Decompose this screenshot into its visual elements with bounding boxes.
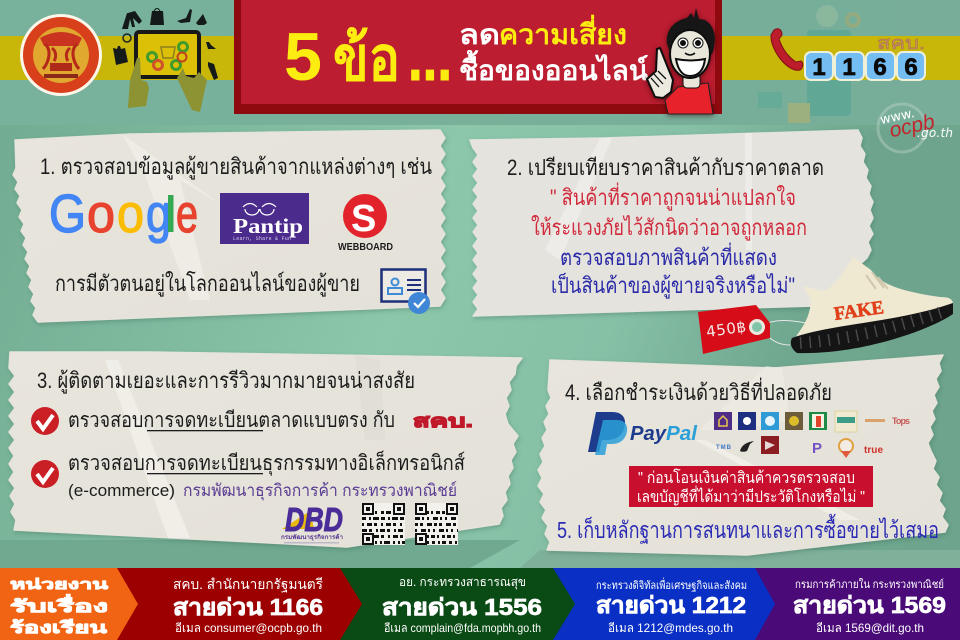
hotline MDES: อีเมล 1212@mdes.go.th xyxy=(608,621,733,635)
footer heading: รับเรื่อง xyxy=(10,594,108,616)
heading 3: 3. ผู้ติดตามเยอะและการรีวิวมากมายจนน่าสงสัย xyxy=(37,368,415,394)
PayPal logo: Pal xyxy=(666,423,697,445)
Pantip logo xyxy=(220,193,309,244)
subtitle line 1 xyxy=(459,14,627,50)
footer heading: หน่วยงาน xyxy=(10,576,109,592)
hotline 1166 xyxy=(805,33,925,81)
subtitle line 1: ความเสี่ยง xyxy=(499,14,627,50)
website suffix: .go.th xyxy=(917,126,953,140)
Pantip logo: Learn, Share & Fun xyxy=(233,236,291,242)
hotline FDA: สายด่วน 1556 xyxy=(382,594,542,620)
DBD logo: กรมพัฒนาธุรกิจการค้า xyxy=(281,533,343,541)
footer heading: ร้องเรียน xyxy=(10,618,107,637)
warning text blue xyxy=(551,242,795,299)
warning text red xyxy=(531,182,807,241)
QR code 2 xyxy=(415,503,458,545)
website: www. xyxy=(879,106,916,128)
panel 2 xyxy=(470,130,873,316)
hotline FDA: อีเมล complain@fda.mopbh.go.th xyxy=(384,621,541,635)
price tag xyxy=(698,305,806,354)
price tag: 450฿ xyxy=(705,318,747,341)
e-commerce line: กรมพัฒนาธุรกิจการค้า กระทรวงพาณิชย์ xyxy=(183,481,457,501)
hotline DIT xyxy=(793,578,946,635)
Google logo xyxy=(49,184,198,244)
hotline FDA xyxy=(382,575,542,635)
hotline DIT: อีเมล 1569@dit.go.th xyxy=(816,621,924,635)
subtitle line 1: ลด xyxy=(459,19,500,50)
shopping tablet icon xyxy=(113,8,218,112)
hotline OCPB: อีเมล consumer@ocpb.go.th xyxy=(175,621,322,635)
warning text blue: เป็นสินค้าของผู้ขายจริงหรือไม่" xyxy=(551,271,795,299)
panel 4 xyxy=(538,355,948,555)
hotline FDA: อย. กระทรวงสาธารณสุข xyxy=(399,575,526,590)
main title: ข้อ xyxy=(333,25,400,94)
warning text red: ให้ระแวงภัยไว้สักนิดว่าอาจถูกหลอก xyxy=(531,215,807,241)
check line 1: ตรวจสอบการจดทะเบียนตลาดแบบตรง กับ xyxy=(68,409,395,432)
Google logo: G xyxy=(49,184,86,244)
webboard logo xyxy=(338,194,393,253)
Google logo: e xyxy=(176,184,198,244)
phone icon xyxy=(771,29,803,70)
yellow band xyxy=(0,36,960,80)
PayPal logo xyxy=(588,412,697,455)
heading 2: 2. เปรียบเทียบราคาสินค้ากับราคาตลาด xyxy=(507,155,824,180)
hotline MDES: สายด่วน 1212 xyxy=(596,592,746,618)
hotline DIT: กรมการค้าภายใน กระทรวงพาณิชย์ xyxy=(795,578,944,591)
hotline 1166: 1 xyxy=(842,54,856,81)
fake sneaker xyxy=(791,257,953,353)
hotline OCPB: สายด่วน 1166 xyxy=(173,594,323,620)
DBD logo: DBD xyxy=(285,501,343,538)
warning text blue: ตรวจสอบภาพสินค้าที่แสดง xyxy=(560,242,777,270)
red callout xyxy=(629,466,873,507)
panel 1 xyxy=(13,130,445,322)
subtitle line 2: ชื้อของออนไลน์ xyxy=(459,49,648,86)
hotline 1166: 6 xyxy=(873,54,887,81)
identity line: การมีตัวตนอยู่ในโลกออนไลน์ของผู้ขาย xyxy=(55,271,360,297)
Google logo: g xyxy=(146,184,171,244)
payment icons xyxy=(714,411,910,458)
payment icons: TMB xyxy=(716,445,732,451)
hotline DIT: สายด่วน 1569 xyxy=(793,592,946,618)
webboard logo: S xyxy=(351,198,376,240)
e-commerce line xyxy=(68,481,457,501)
hotline 1166: 1 xyxy=(812,54,826,81)
footer band xyxy=(0,568,960,640)
webboard logo: WEBBOARD xyxy=(338,242,393,253)
check line 1: สคบ. xyxy=(413,411,473,431)
Google logo: o xyxy=(87,184,115,244)
e-commerce line: (e-commerce) xyxy=(68,481,175,500)
warning text red: " สินค้าที่ราคาถูกจนน่าแปลกใจ xyxy=(550,182,796,211)
Pantip logo: Pantip xyxy=(233,214,303,238)
hotline MDES xyxy=(596,577,747,635)
heading 1: 1. ตรวจสอบข้อมูลผู้ขายสินค้าจากแหล่งต่างๆ เช่น xyxy=(40,154,432,180)
payment icons: P xyxy=(812,440,822,457)
main title: ... xyxy=(408,20,452,94)
icon: id card xyxy=(382,270,430,314)
hotline MDES: กระทรวงดิจิทัลเพื่อเศรษฐกิจและสังคม xyxy=(596,577,747,592)
agency label: สคบ. xyxy=(877,33,925,53)
footer heading xyxy=(10,576,109,637)
website: ocpb xyxy=(887,110,937,142)
red callout: " ก่อนโอนเงินค่าสินค้าควรตรวจสอบ xyxy=(638,468,855,487)
heading 4: 4. เลือกชำระเงินด้วยวิธีที่ปลอดภัย xyxy=(565,377,832,405)
icon: red check 1 xyxy=(31,407,59,435)
DBD logo xyxy=(281,501,343,544)
payment icons: true xyxy=(864,445,883,456)
PayPal logo: Pay xyxy=(630,423,667,445)
fake label: FAKE xyxy=(833,297,885,325)
faint background icons xyxy=(758,5,926,152)
QR code 1 xyxy=(362,503,405,545)
website xyxy=(879,102,937,144)
red callout: เลขบัญชีที่ได้มาว่ามีประวัติโกงหรือไม่ " xyxy=(637,485,865,506)
hotline 1166: 6 xyxy=(904,54,918,81)
title banner xyxy=(234,0,722,114)
check line 2: ตรวจสอบการจดทะเบียนธุรกรรมทางอิเล็กทรอนิกส์ xyxy=(68,449,465,476)
hotline OCPB xyxy=(173,576,323,635)
Google logo: o xyxy=(117,184,144,244)
main title: 5 xyxy=(284,19,322,95)
cartoon mascot xyxy=(647,8,715,114)
main title xyxy=(284,19,452,95)
icon: red check 2 xyxy=(31,460,59,488)
seal logo xyxy=(20,14,102,96)
hotline OCPB: สคบ. สำนักนายกรัฐมนตรี xyxy=(173,576,323,593)
payment icons: Tops xyxy=(892,416,910,426)
panel 3 xyxy=(9,352,522,547)
